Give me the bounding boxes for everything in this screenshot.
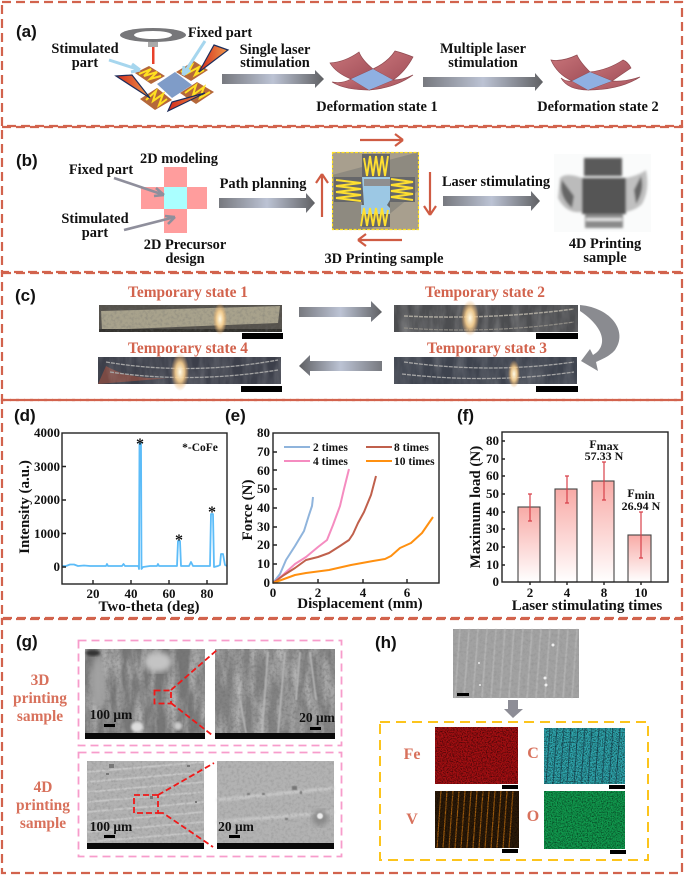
SEM: 3D high magnification [215, 649, 335, 739]
y tick labels: 30 [257, 519, 270, 534]
y tick labels: 60 [257, 463, 270, 478]
legend: *-CoFe [182, 442, 218, 454]
label: fixed part: Fixed part [69, 162, 133, 178]
callout Fmax: F [589, 437, 597, 451]
x label: Displacement (mm) [297, 596, 423, 612]
force displacement chart [240, 425, 439, 612]
sample box 3D [78, 640, 342, 746]
callout Fmax: 57.33 N [585, 449, 624, 463]
label: stimulated part: Stimulated [61, 211, 129, 227]
map: O [544, 791, 625, 849]
heading h: (h) [375, 633, 397, 652]
peak stars: * [136, 436, 144, 453]
element labels: V [406, 811, 418, 828]
x tick labels: 0 [270, 585, 276, 600]
scale bar [536, 386, 578, 392]
y tick labels: 0 [492, 574, 499, 589]
y label: Maximum load (N) [468, 446, 484, 568]
label: 3D printing sample: 3D Printing sample [324, 251, 444, 267]
y tick labels: 70 [486, 451, 499, 466]
scale bar [242, 333, 283, 339]
zoom callout 4D [134, 763, 214, 847]
x tick labels [270, 585, 411, 600]
arrow path planning [219, 193, 315, 213]
element labels [404, 745, 539, 828]
label: 3D printing sample: 3D [31, 672, 49, 689]
scale bar [241, 386, 282, 392]
y label: Force (N) [240, 480, 256, 540]
SEM: 4D high magnification [217, 761, 334, 849]
y tick labels: 3000 [34, 459, 60, 474]
icon: red triangle mirrors [116, 45, 228, 111]
sample box 4D [78, 752, 342, 856]
bar chart [468, 432, 668, 614]
heading e: (e) [225, 406, 246, 425]
legend [284, 442, 435, 468]
map: V [435, 791, 519, 848]
panel: a [16, 22, 659, 115]
panel: f [457, 406, 668, 614]
arrow left [299, 355, 382, 376]
heading g: (g) [16, 632, 38, 651]
y tick labels: 50 [257, 481, 270, 496]
cross sample with laser paths [116, 45, 228, 111]
label: 4D printing sample: sample [20, 815, 66, 832]
legend: 10 times [394, 456, 435, 468]
y tick labels: 80 [486, 433, 499, 448]
heading a: (a) [16, 22, 37, 41]
label: laser stimulating: Laser stimulating [442, 174, 551, 190]
title: temporary state 2: Temporary state 2 [425, 284, 545, 301]
zoom callout 3D [154, 650, 217, 735]
scale labels: 20 μm [218, 819, 255, 834]
scale labels: 100 μm [90, 819, 133, 834]
label: 2D precursor design: 2D Precursor [144, 237, 227, 253]
SEM overview [453, 629, 579, 698]
label: 4D printing sample: sample [583, 250, 627, 266]
arrow 1 [222, 70, 324, 88]
deformation state 2 shape [551, 55, 640, 90]
2D precursor cross [141, 167, 207, 233]
map: C [544, 728, 625, 784]
frame and ticks [502, 432, 668, 585]
callout Fmax: max [597, 439, 619, 453]
label: 4D printing sample: 4D [34, 779, 52, 796]
legend: 2 times [313, 442, 348, 454]
photo: state 3 [394, 357, 577, 388]
y tick labels: 70 [257, 444, 270, 459]
photo: 4D printing sample [554, 154, 651, 232]
heading c: (c) [15, 286, 36, 305]
deformation state 1 shape [330, 51, 413, 90]
y tick labels: 60 [486, 468, 499, 483]
panel: d [14, 406, 227, 615]
arrows: light blue pointers [109, 41, 205, 75]
heading f: (f) [457, 406, 474, 425]
scale labels: 20 μm [299, 710, 336, 725]
x label: Two-theta (deg) [99, 599, 199, 615]
photo: 3D printing sample [332, 152, 419, 230]
y tick labels: 20 [257, 537, 270, 552]
label: 3D printing sample: sample [17, 708, 63, 725]
y tick labels [34, 425, 60, 574]
label: fixed part: Fixed part [188, 25, 252, 41]
label: stimulated part: Stimulated [51, 41, 119, 57]
panel: h [375, 629, 648, 860]
peak stars: * [175, 532, 183, 549]
mapping box [380, 722, 648, 860]
y tick labels: 50 [486, 486, 499, 501]
arrow 2 [423, 73, 543, 91]
panel: b [16, 134, 651, 267]
y tick labels: 2000 [34, 492, 60, 507]
y tick labels: 30 [486, 521, 499, 536]
callout Fmin: 26.94 N [622, 499, 661, 513]
XRD chart [17, 425, 227, 615]
y tick labels: 10 [257, 556, 270, 571]
y tick labels: 1000 [34, 526, 60, 541]
x tick labels: 10 [634, 585, 648, 600]
heading d: (d) [14, 406, 36, 425]
y tick labels: 0 [54, 559, 60, 574]
x tick labels: 40 [124, 586, 138, 601]
legend: 8 times [394, 442, 429, 454]
x tick labels: 8 [601, 585, 608, 600]
label: stimulated part: part [72, 55, 98, 71]
callout Fmin: min [635, 488, 655, 502]
label: 2D precursor design: design [165, 251, 205, 267]
photo: state 1 [99, 303, 282, 335]
label: single laser stimulation: Single laser [240, 42, 311, 58]
photo: state 2 [394, 300, 578, 336]
label: stimulated part: part [82, 225, 108, 241]
x tick labels: 20 [86, 586, 100, 601]
label: path planning: Path planning [220, 176, 307, 192]
arrows: gray pointers [114, 178, 175, 230]
panel: g [13, 632, 342, 856]
x tick labels: 6 [404, 585, 411, 600]
scale labels [90, 707, 336, 838]
label: 4D printing sample: 4D Printing [569, 236, 642, 252]
label: deformation state 1: Deformation state 1 [316, 99, 438, 115]
label: multiple laser stimulation: stimulation [448, 55, 518, 71]
y tick labels: 40 [486, 504, 499, 519]
x tick labels: 2 [315, 585, 321, 600]
heading b: (b) [16, 151, 38, 170]
x tick labels: 60 [162, 586, 176, 601]
photo: state 4 [98, 353, 281, 391]
title: temporary state 4: Temporary state 4 [128, 340, 248, 357]
arrow right [299, 301, 382, 322]
peak stars [136, 436, 216, 549]
SEM: 3D low magnification [85, 649, 205, 739]
scale labels: 100 μm [90, 707, 133, 722]
y tick labels: 0 [264, 575, 270, 590]
label: 4D printing sample: printing [16, 797, 70, 814]
arrow down [504, 700, 523, 718]
y tick labels: 20 [486, 539, 499, 554]
scale bars [502, 785, 626, 854]
error bars [528, 462, 643, 558]
legend: 4 times [313, 456, 348, 468]
x label: Laser stimulating times [512, 598, 662, 614]
scale bar [536, 333, 578, 339]
SEM: 4D low magnification [87, 761, 204, 849]
arrows: red path around sample [316, 134, 436, 246]
icon: laser head [120, 28, 186, 64]
label: deformation state 2: Deformation state 2 [537, 99, 659, 115]
panel: e [225, 406, 439, 612]
bars [518, 481, 651, 582]
label: 2D modeling: 2D modeling [140, 151, 219, 167]
x tick labels: 4 [564, 585, 571, 600]
map: Fe [435, 727, 518, 784]
frame and ticks [273, 433, 439, 583]
x tick labels: 80 [200, 586, 214, 601]
label: 3D printing sample: printing [13, 690, 67, 707]
arrow curved [580, 305, 620, 371]
element labels: Fe [404, 746, 420, 763]
x tick labels [86, 586, 214, 601]
y tick labels: 80 [257, 425, 270, 440]
x tick labels [527, 585, 648, 600]
callout Fmin: F [627, 486, 635, 500]
x tick labels: 4 [360, 585, 367, 600]
title: temporary state 3: Temporary state 3 [427, 340, 547, 357]
y tick labels: 40 [257, 500, 270, 515]
panel: c [15, 284, 620, 392]
x tick labels: 2 [527, 585, 533, 600]
label: multiple laser stimulation: Multiple laser [440, 41, 527, 57]
arrow laser stimulating [443, 191, 540, 211]
peak stars: * [208, 504, 216, 521]
y label: Intensity (a.u.) [17, 460, 33, 554]
y tick labels [486, 433, 499, 589]
label: single laser stimulation: stimulation [240, 55, 310, 71]
element labels: O [527, 808, 539, 825]
y tick labels: 4000 [34, 425, 60, 440]
element labels: C [527, 745, 539, 762]
y tick labels [257, 425, 270, 590]
title: temporary state 1: Temporary state 1 [128, 284, 248, 301]
y tick labels: 10 [486, 557, 499, 572]
frame and ticks [62, 433, 227, 584]
